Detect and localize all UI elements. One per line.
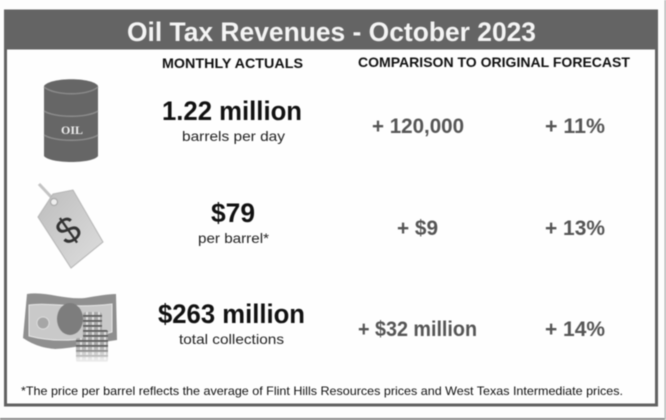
row 1 comparison: + 120,000 (372, 115, 464, 138)
row 2 comparison: + $9 (397, 217, 438, 240)
row 1 comparison: + 11% (545, 115, 605, 138)
icon: money and coins (23, 293, 117, 362)
row 3 comparison: + $32 million (358, 318, 477, 341)
row 2 comparison: + 13% (545, 217, 605, 240)
row 2 comparison (397, 217, 605, 240)
icon: oil barrel: OIL (61, 123, 83, 137)
row 2 actual: price per barrel (198, 198, 270, 246)
row 1 actual: barrels per day: barrels per day (182, 128, 285, 144)
row 3 comparison: + 14% (545, 318, 605, 341)
row 3 actual: total collections: total collections (179, 331, 284, 347)
row 3 actual: total collections: $263 million (158, 299, 305, 329)
row 3 comparison (358, 318, 605, 341)
row 2 actual: price per barrel: per barrel* (198, 230, 270, 246)
row 3 actual: total collections (158, 299, 305, 347)
row 1 actual: barrels per day (162, 96, 302, 144)
header bar (4, 10, 658, 50)
footnote: *The price per barrel reflects the average of Flint Hills Resources prices and West Texas Intermediate prices. (21, 384, 623, 398)
title: Oil Tax Revenues - October 2023 (127, 17, 536, 47)
column heading: comparison to original forecast: COMPARISON TO ORIGINAL FORECAST (358, 54, 630, 70)
row 1 actual: barrels per day: 1.22 million (162, 96, 302, 126)
column heading: monthly actuals: MONTHLY ACTUALS (162, 55, 303, 71)
row 2 actual: price per barrel: $79 (211, 198, 255, 228)
icon: price tag (38, 184, 103, 268)
icon: oil barrel (44, 79, 98, 162)
row 1 comparison (372, 115, 605, 138)
icon: price tag: $ (48, 208, 88, 253)
